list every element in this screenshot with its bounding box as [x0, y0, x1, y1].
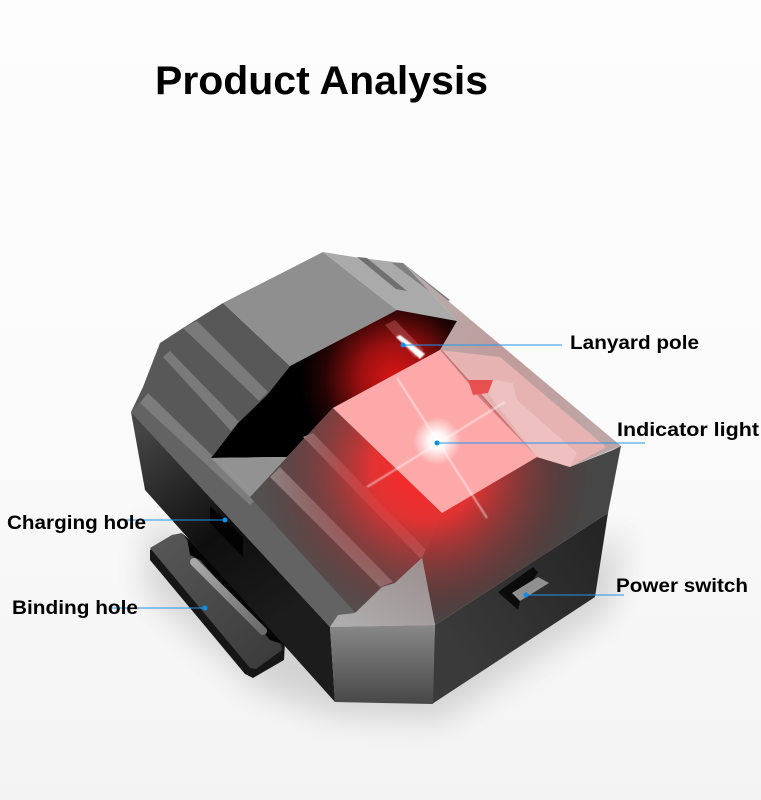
callout: lanyard pole: Lanyard pole — [570, 333, 699, 354]
callout: binding hole: Binding hole — [12, 598, 138, 619]
centre lower area — [250, 408, 442, 613]
corner tip — [330, 558, 435, 627]
power switch — [498, 567, 549, 610]
device body — [131, 252, 630, 704]
lower stripes — [270, 433, 428, 587]
left light stripes — [163, 321, 268, 431]
right upper face — [422, 446, 621, 625]
lanyard pole — [385, 320, 425, 359]
lanyard cavity — [211, 310, 457, 458]
callout: power switch: Power switch — [616, 576, 748, 597]
front block — [330, 625, 435, 704]
callout: charging hole: Charging hole — [7, 513, 146, 534]
mounting bracket — [150, 533, 285, 678]
callout: power switch — [524, 576, 748, 598]
wedge below cavity — [211, 457, 287, 497]
binding hole slot — [194, 562, 263, 631]
rail beyond the cube — [403, 263, 621, 467]
charging hole — [210, 506, 243, 557]
right lower face — [432, 513, 608, 704]
star flare — [367, 378, 505, 518]
callout: lanyard pole — [400, 333, 699, 354]
callout: indicator light — [434, 420, 760, 446]
callout: indicator light: Indicator light — [617, 420, 760, 441]
chamfer strip — [131, 394, 355, 627]
left lower face — [131, 412, 335, 702]
left shoulder — [131, 303, 330, 627]
red glow — [270, 350, 572, 612]
callout: binding hole — [12, 598, 208, 619]
top grey face — [223, 252, 397, 366]
callout: charging hole — [7, 513, 228, 534]
small pole on right — [468, 380, 577, 467]
indicator cube face — [333, 350, 537, 513]
title: Product Analysis — [155, 59, 488, 103]
ground shadow — [145, 520, 625, 720]
top right strip — [323, 252, 457, 321]
